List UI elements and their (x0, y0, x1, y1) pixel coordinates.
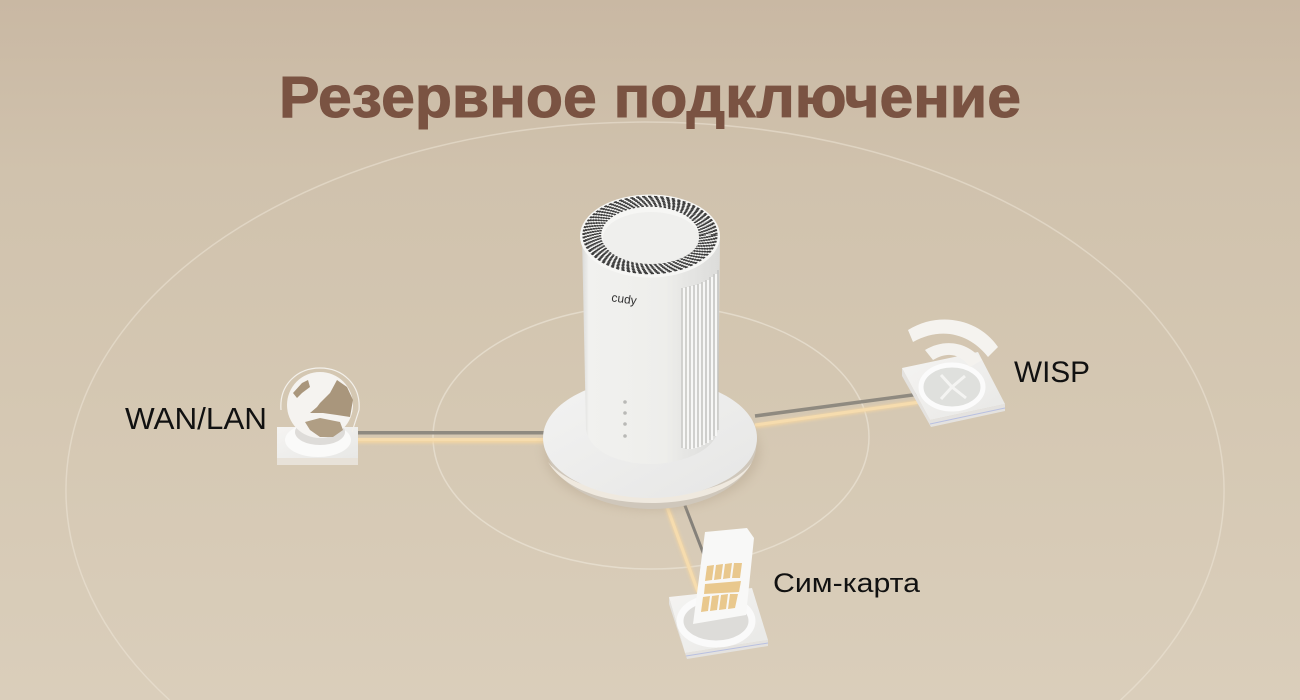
router on base (543, 194, 760, 510)
top disc (603, 212, 699, 264)
SIM card (693, 528, 754, 624)
SIM contacts (701, 563, 742, 612)
top rim (580, 194, 720, 278)
brand logo: cudy (611, 290, 638, 308)
ring (680, 598, 752, 644)
cross mark (941, 375, 966, 399)
inner signal ring (433, 305, 869, 569)
orbit arc (281, 368, 359, 432)
connection line: WISP (755, 394, 920, 426)
round base (543, 378, 757, 509)
globe (287, 372, 353, 438)
title: Резервное подключение (279, 65, 1021, 130)
icon: WiFi on tile (902, 319, 1005, 427)
ring (921, 365, 983, 409)
router body (582, 236, 720, 464)
tile (902, 352, 1005, 427)
ring holder (285, 423, 351, 457)
label: WISP: WISP (1014, 356, 1090, 389)
vent ring (584, 196, 716, 274)
icon: globe on tile (277, 368, 359, 465)
connection line: SIM (666, 503, 704, 592)
base shadow (544, 394, 760, 510)
side ribs (682, 270, 718, 449)
continents (293, 380, 353, 437)
tile (669, 588, 768, 659)
label: WAN/LAN: WAN/LAN (125, 401, 267, 436)
icon: SIM card on tile (669, 528, 768, 659)
connection line: WAN/LAN (355, 431, 547, 443)
label: SIM card: Сим-карта (773, 568, 921, 598)
wifi arcs (925, 343, 982, 367)
outer signal ring (66, 122, 1224, 700)
tile (277, 427, 358, 465)
status lights (623, 400, 627, 438)
